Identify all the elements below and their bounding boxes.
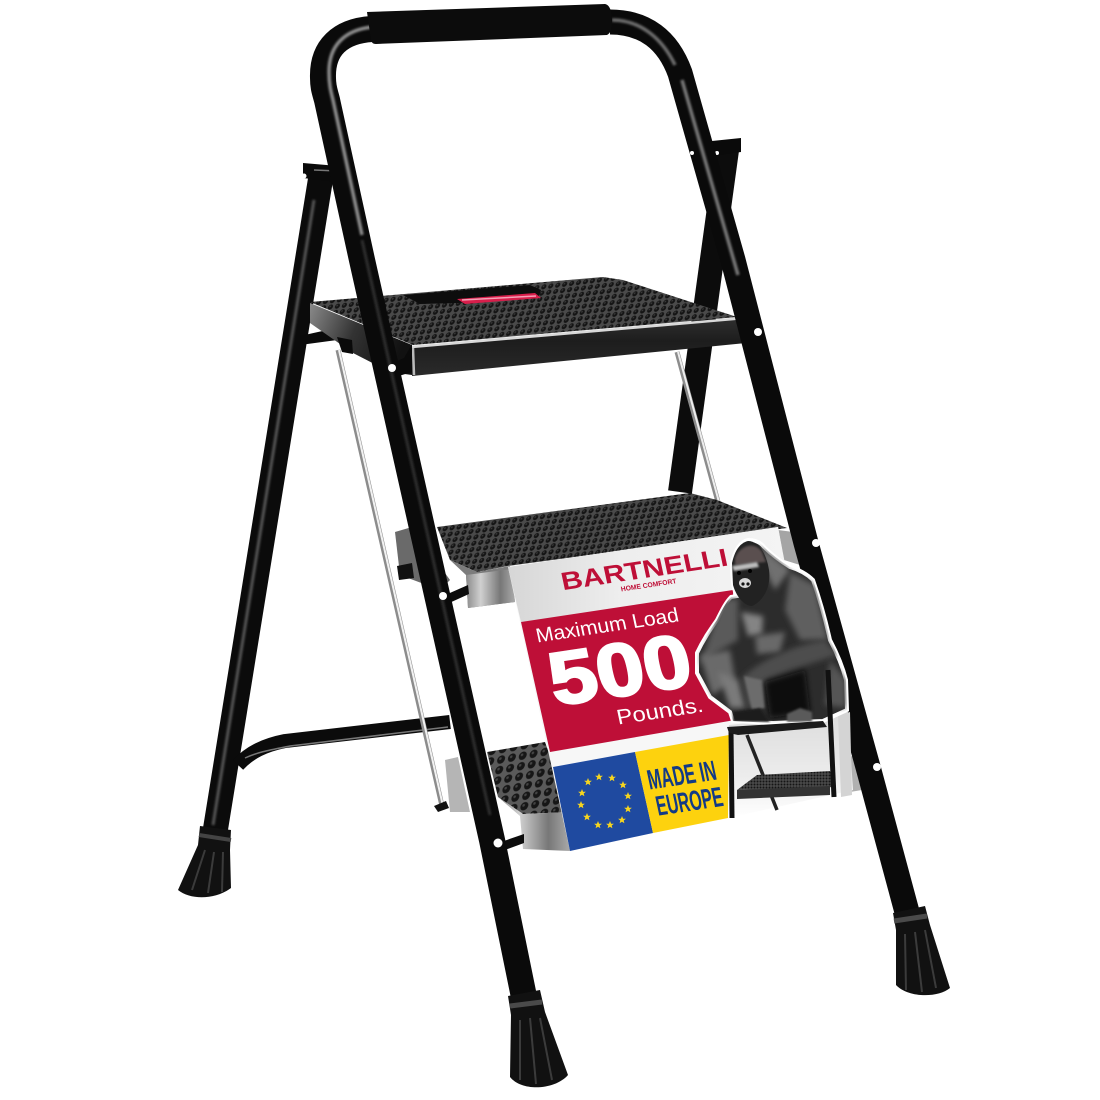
gorilla fur shading [700,545,846,722]
europe: EUROPE [653,781,726,821]
foot: rear left [178,826,231,897]
bottom step [445,742,862,851]
gorilla [697,540,847,723]
unit: Pounds. [615,694,705,729]
gorilla head [732,541,769,606]
rear legs [213,138,741,832]
bottom cross bar [238,722,450,765]
top step [300,277,746,378]
foot: front [508,990,568,1087]
EU flag blue panel [553,752,653,851]
foam hand grip [367,4,612,44]
mini ladder top tread and right post [727,670,834,797]
foot: right [893,906,950,995]
stepladder product illustration [178,4,950,1088]
middle step [395,493,801,608]
card text [523,544,780,834]
yellow made in europe panel [635,735,729,833]
front frame with top handle [323,20,907,997]
chrome folding braces [338,350,719,812]
brand name: BARTNELLI [558,544,730,596]
rivets [388,151,881,848]
red load panel [521,590,735,752]
load number: 500 [541,618,699,721]
carry handle slot with red accent [403,285,541,304]
mini ladder picture [728,712,853,818]
card base [508,527,853,851]
EU stars ring [577,773,632,828]
rubber feet [178,826,950,1087]
maximum load promo card [508,527,853,851]
made in: MADE IN [644,755,719,795]
maximum load label: Maximum Load [534,605,681,647]
brand tagline: HOME COMFORT [620,578,678,593]
card header band [508,527,790,622]
